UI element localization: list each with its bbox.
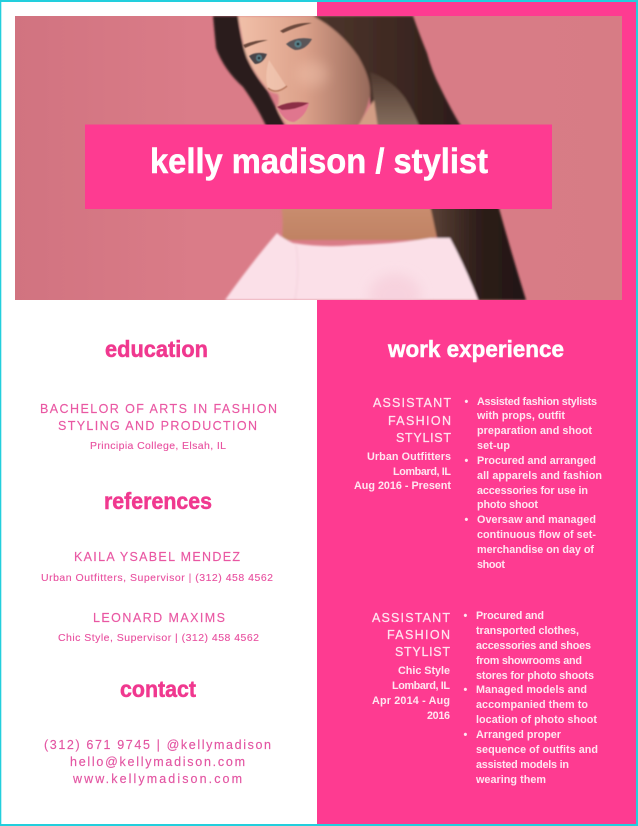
contact details: www.kellymadison.com bbox=[72, 772, 242, 786]
cheek glow bbox=[296, 61, 328, 87]
job 1 duties: all apparels and fashion bbox=[477, 470, 602, 482]
job 1 duties: merchandise on day of bbox=[477, 544, 594, 556]
dress shadow bbox=[372, 276, 418, 300]
job 1 details: FASHION bbox=[388, 414, 451, 428]
left eye bbox=[249, 53, 267, 64]
job 1 duties: preparation and shoot bbox=[477, 425, 592, 437]
job 1 duties: with props, outfit bbox=[476, 410, 565, 422]
job 2 details: FASHION bbox=[387, 628, 450, 642]
job 1 details: Lombard, IL bbox=[393, 466, 451, 478]
shoulder and neck bbox=[280, 125, 436, 240]
job 1 details: ASSISTANT bbox=[373, 396, 451, 410]
reference: Leonard Maxims: Chic Style, Supervisor | (312) 458 4562 bbox=[58, 632, 259, 644]
job 2 duties: assisted models in bbox=[476, 759, 569, 771]
job 1 duties: photo shoot bbox=[477, 499, 538, 511]
degree: BACHELOR OF ARTS IN FASHION bbox=[40, 402, 277, 416]
heading: work experience: work experience bbox=[387, 336, 564, 362]
dress bbox=[225, 233, 478, 300]
job 1 duties: • bbox=[464, 455, 468, 467]
job 1 duties: continuous flow of set- bbox=[477, 529, 596, 541]
job 1 duties: Procured and arranged bbox=[477, 455, 596, 467]
job 2 details: 2016 bbox=[427, 710, 450, 722]
job 1 details: STYLIST bbox=[396, 431, 451, 445]
job 2 duties: Arranged proper bbox=[476, 729, 562, 741]
job 2 duties: • bbox=[464, 729, 468, 741]
reference: Leonard Maxims bbox=[58, 611, 259, 644]
degree: STYLING AND PRODUCTION bbox=[58, 419, 257, 433]
job 1 duties: accessories for use in bbox=[477, 485, 588, 497]
job 1 details bbox=[354, 396, 451, 492]
job 1 duties bbox=[464, 396, 602, 571]
contact details: (312) 671 9745 | @kellymadison bbox=[44, 738, 271, 752]
reference: Kaila Ysabel Mendez: KAILA YSABEL MENDEZ bbox=[74, 550, 240, 564]
job 1 details: Aug 2016 - Present bbox=[354, 480, 451, 492]
job 1 duties: • bbox=[464, 514, 468, 526]
job 1 duties: shoot bbox=[477, 559, 505, 571]
job 1 duties: set-up bbox=[477, 440, 510, 452]
panel: work experience bbox=[354, 336, 602, 786]
job 2 duties: wearing them bbox=[475, 774, 546, 786]
contact details: hello@kellymadison.com bbox=[70, 755, 245, 769]
degree bbox=[40, 402, 277, 433]
job 2 duties: accessories and shoes bbox=[476, 640, 591, 652]
job 2 duties: stores for photo shoots bbox=[476, 670, 594, 682]
face bbox=[238, 16, 370, 128]
heading: references: references bbox=[104, 488, 212, 514]
title: kelly madison / stylist bbox=[150, 142, 488, 181]
left hair lock bbox=[213, 16, 286, 128]
job 2 duties: location of photo shoot bbox=[476, 714, 597, 726]
job 1 duties: • bbox=[464, 396, 468, 408]
school: Principia College, Elsah, IL bbox=[90, 440, 226, 452]
job 2 details: Chic Style bbox=[398, 665, 450, 677]
hair lower section bbox=[430, 205, 526, 300]
nose bbox=[266, 60, 286, 91]
eyebrows bbox=[280, 23, 312, 33]
heading: contact: contact bbox=[120, 676, 196, 702]
job 2 details: Apr 2014 - Aug bbox=[372, 695, 450, 707]
job 2 details: Lombard, IL bbox=[392, 680, 450, 692]
job 2 duties: • bbox=[464, 610, 468, 622]
heading: education: education bbox=[105, 336, 208, 362]
job 2 duties: sequence of outfits and bbox=[476, 744, 598, 756]
reference: Kaila Ysabel Mendez: Urban Outfitters, Supervisor | (312) 458 4562 bbox=[41, 572, 273, 584]
job 2 duties bbox=[464, 610, 598, 786]
pink right panel bbox=[317, 0, 638, 826]
job 2 duties: accompanied them to bbox=[476, 699, 588, 711]
job 1 duties: Oversaw and managed bbox=[477, 514, 596, 526]
photo: model portrait bbox=[15, 16, 622, 318]
neck skin at hair edge bbox=[359, 100, 379, 124]
job 2 duties: • bbox=[464, 684, 468, 696]
job 2 duties: from showrooms and bbox=[476, 655, 582, 667]
job 2 details: ASSISTANT bbox=[372, 611, 450, 625]
hair mass, top to banner bbox=[313, 16, 462, 124]
contact details bbox=[44, 738, 271, 786]
job 2 details bbox=[372, 611, 450, 722]
reference: Leonard Maxims: LEONARD MAXIMS bbox=[93, 611, 225, 625]
job 2 duties: transported clothes, bbox=[476, 625, 579, 637]
job 2 duties: Procured and bbox=[476, 610, 544, 622]
job 1 details: Urban Outfitters bbox=[367, 451, 451, 463]
hair highlight bbox=[370, 72, 420, 128]
job 2 duties: Managed models and bbox=[476, 684, 587, 696]
title banner bbox=[85, 124, 552, 209]
panel: references bbox=[41, 488, 273, 644]
right eye bbox=[286, 38, 312, 50]
job 2 details: STYLIST bbox=[395, 645, 450, 659]
panel: contact bbox=[44, 676, 271, 786]
job 1 duties: Assisted fashion stylists bbox=[477, 396, 597, 408]
reference: Kaila Ysabel Mendez bbox=[41, 550, 273, 584]
lips bbox=[277, 102, 309, 122]
panel: education bbox=[40, 336, 277, 452]
